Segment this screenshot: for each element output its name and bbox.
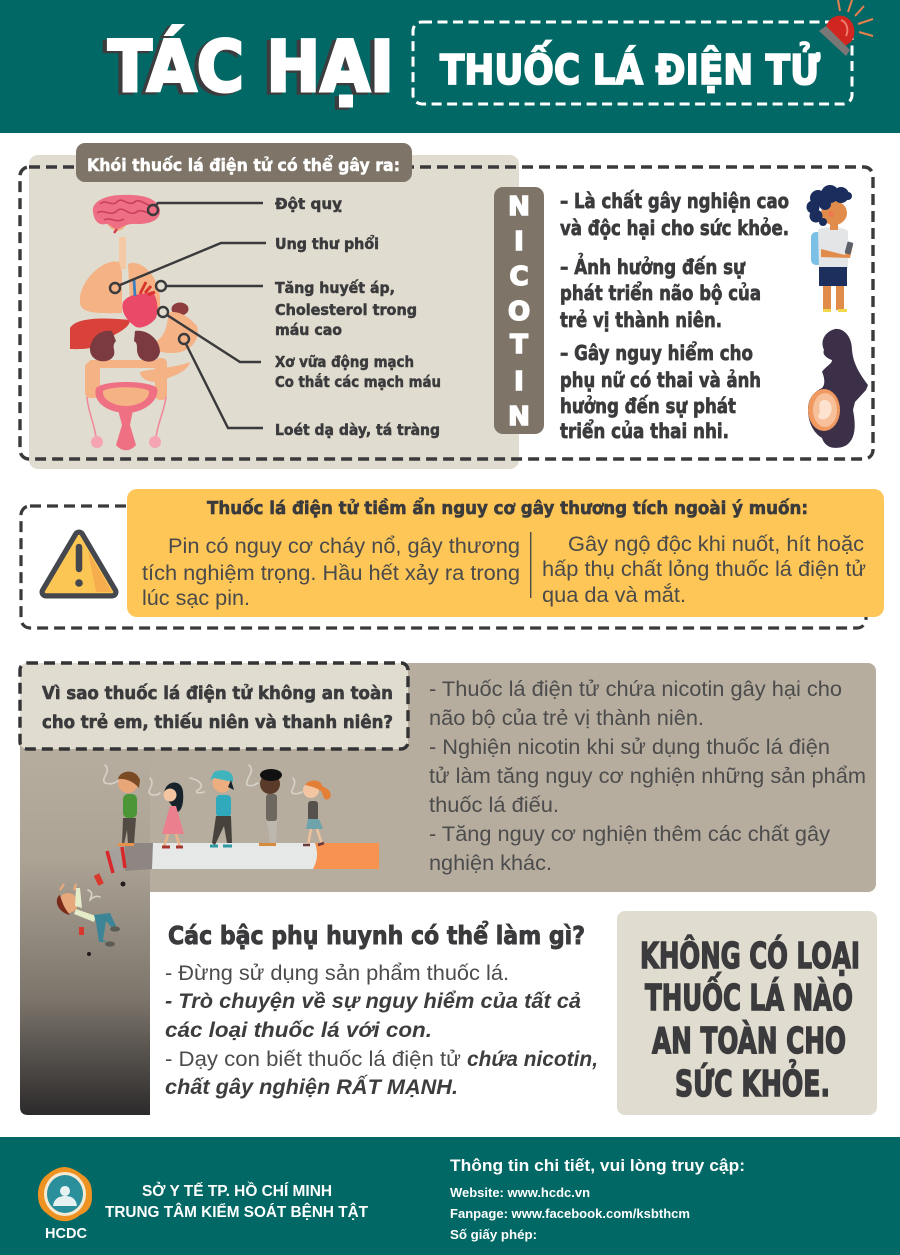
illustration: falling person [57,884,120,947]
question box [20,663,408,749]
advice list: - Trò chuyện về sự nguy hiểm của tất cả [165,989,581,1013]
reasons text [429,677,866,875]
left text: battery: Pin có nguy cơ cháy nổ, gây thương [168,534,520,558]
organ: liver [70,319,130,349]
person 5 [303,781,331,845]
vertical label: NICOTIN: C [509,262,529,292]
left text: battery [142,534,520,610]
organ labels: Ung thư phổi [275,234,379,253]
organ labels: Đột quỵ [275,195,342,213]
question box: Vì sao thuốc lá điện tử không an toàn [42,683,393,704]
reasons text: nghiện khác. [429,851,552,875]
nicotin text block: trẻ vị thành niên. [560,308,722,332]
yellow card [127,489,884,617]
callout lines [110,203,266,428]
reasons text: - Thuốc lá điện tử chứa nicotin gây hại cho [429,677,842,701]
person 1 [118,772,140,846]
smoke wisps [88,765,302,900]
gradient column [20,740,150,1115]
dashed title box [413,22,852,104]
panel: smoke harms and nicotin [20,143,873,469]
callout: no safe tobacco [617,911,877,1115]
organ labels: Xơ vữa động mạch [275,353,414,371]
vertical label: NICOTIN: T [510,330,528,360]
nicotin text block: triển của thai nhi. [560,419,729,443]
illustration: giant cigarette [107,843,379,873]
debris fragments [79,873,126,956]
contact information: Thông tin chi tiết, vui lòng truy cập: [450,1156,745,1175]
footer band [0,1137,900,1255]
heading pill: Khói thuốc lá điện tử có thể gây ra: [87,154,400,176]
organ labels: Co thắt các mạch máu [275,372,441,391]
advice list [165,961,598,1099]
title: TÁC HẠI: TÁC HẠI [104,28,390,110]
reasons text: tử làm tăng nguy cơ nghiện những sản phẩm [429,764,866,788]
contact information: Số giấy phép: [450,1228,537,1242]
logo: HCDC: HCDC [45,1226,88,1242]
organ: stomach [155,302,198,353]
right text: poisoning: qua da và mắt. [542,582,686,607]
dashed panel frame [20,167,873,459]
organ: kidneys [90,331,160,362]
dashed frame [21,506,866,628]
organ: heart [122,280,157,328]
heading pill [76,143,412,182]
illustration: human organs [70,195,198,450]
illustration: youths walking on cigarette [118,769,331,847]
vertical label: NICOTIN: O [508,297,530,327]
left text: battery: tích nghiệm trọng. Hầu hết xảy ra trong [142,561,520,585]
reasons text: - Tăng nguy cơ nghiện thêm các chất gây [429,822,830,846]
organ labels [275,195,441,439]
left text: battery: lúc sạc pin. [142,586,250,610]
organ: reproductive tract [87,397,166,450]
organ: brain [93,195,160,233]
organ: intestines and pancreas [85,358,190,400]
right text: poisoning: hấp thụ chất lỏng thuốc lá điện tử [542,557,866,581]
reasons text: não bộ của trẻ vị thành niên. [429,706,704,730]
vertical label: NICOTIN: N [508,192,530,222]
advice list: - Đừng sử dụng sản phẩm thuốc lá. [165,961,509,985]
subtitle: THUỐC LÁ ĐIỆN TỬ: THUỐC LÁ ĐIỆN TỬ [440,40,821,94]
organ labels: Cholesterol trong [275,301,417,319]
nicotin text block [560,189,789,443]
reasons text: - Nghiện nicotin khi sử dụng thuốc lá điện [429,735,830,759]
nicotin text block: – Là chất gây nghiện cao [560,189,789,213]
callout: no safe tobacco: SỨC KHỎE. [675,1059,830,1105]
advice list: chất gây nghiện RẤT MẠNH. [165,1074,458,1099]
reasons text: thuốc lá điếu. [429,793,559,817]
nicotin text block: hưởng đến sự phát [560,394,736,418]
vertical label: NICOTIN [494,187,544,434]
vertical label: NICOTIN: N [508,402,530,432]
panel: unintended injury [21,489,884,628]
organ labels: Loét dạ dày, tá tràng [275,421,440,439]
organ: lungs [80,262,160,314]
advice list: - Dạy con biết thuốc lá điện tử [165,1047,461,1071]
logo: HCDC [38,1167,92,1242]
panel: why unsafe for youth [20,663,876,1115]
advice list: chứa nicotin, [467,1047,598,1071]
person 2 [162,783,184,847]
icon: alarm siren [819,0,873,56]
right text: poisoning [542,532,866,607]
nicotin text block: và độc hại cho sức khỏe. [560,216,789,240]
nicotin text block: – Ảnh hưởng đến sự [560,254,746,279]
header band [0,0,900,133]
contact information: Website: www.hcdc.vn [450,1186,590,1200]
organ: trachea [119,237,126,269]
contact information [450,1156,745,1242]
nicotin text block: – Gây nguy hiểm cho [560,341,753,365]
organ labels: máu cao [275,321,342,339]
organ labels: Tăng huyết áp, [275,278,395,297]
icon: warning triangle [46,536,112,592]
vertical label: NICOTIN: I [514,227,524,257]
organ: bladder [95,382,157,413]
person 4 [259,769,282,846]
icon: boy with vape [806,185,853,312]
advice list: các loại thuốc lá với con. [165,1018,432,1042]
nicotin text block: phụ nữ có thai và ảnh [560,368,761,392]
organization name [105,1181,368,1221]
heading: Các bậc phụ huynh có thể làm gì? [168,920,585,950]
contact information: Fanpage: www.facebook.com/ksbthcm [450,1207,690,1221]
vertical label: NICOTIN: I [514,367,524,397]
right text: poisoning: Gây ngộ độc khi nuốt, hít hoặc [568,532,864,556]
panel: what parents can do [165,920,598,1099]
question box: cho trẻ em, thiếu niên và thanh niên? [42,712,393,733]
person 3 [210,770,234,846]
nicotin text block: phát triển não bộ của [560,281,761,305]
title: TÁC HẠI: TÁC HẠI [108,26,394,108]
organization name: TRUNG TÂM KIỂM SOÁT BỆNH TẬT [105,1202,368,1221]
card heading: Thuốc lá điện tử tiềm ẩn nguy cơ gây thương tích ngoài ý muốn: [207,497,808,519]
icon: pregnant woman [808,329,868,448]
organization name: SỞ Y TẾ TP. HỒ CHÍ MINH [142,1181,332,1200]
